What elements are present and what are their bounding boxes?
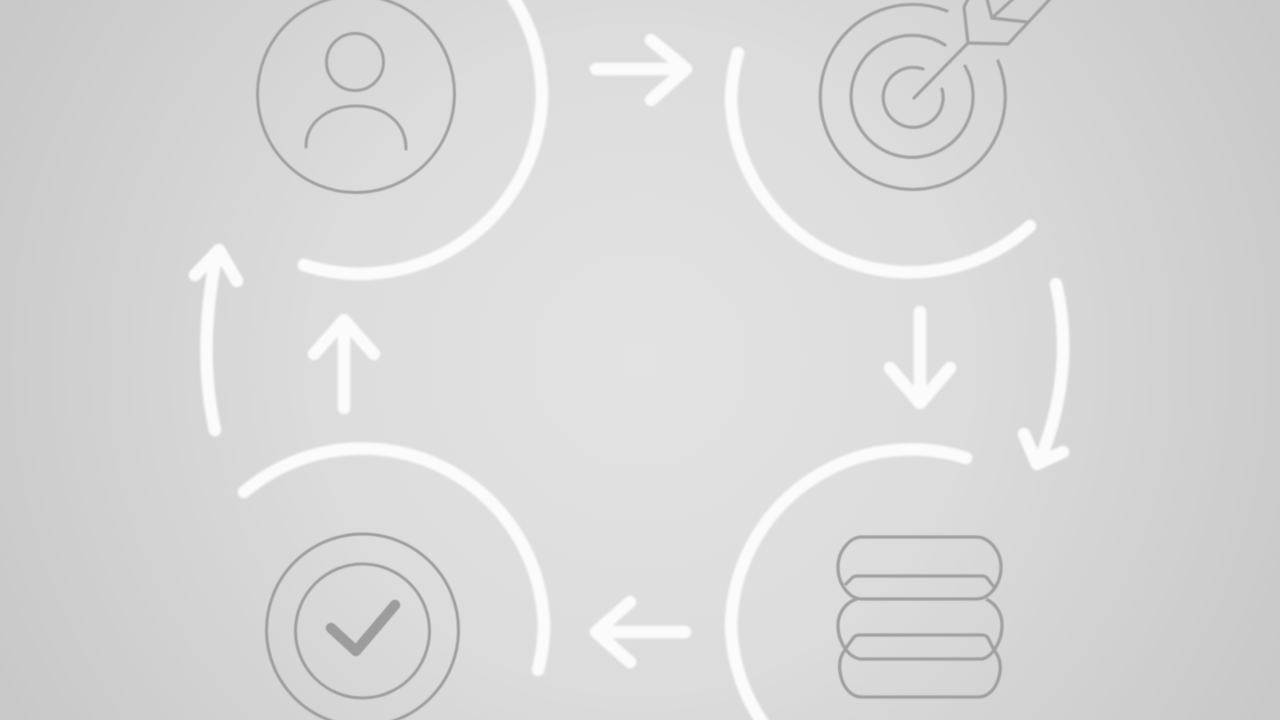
white arcs and arrows xyxy=(195,0,1063,720)
arc: bottom right xyxy=(731,449,966,720)
icon: person xyxy=(258,0,454,192)
arrow: bottom, pointing left xyxy=(596,602,685,662)
arrow: left inner, pointing up xyxy=(314,320,374,408)
arc: top right xyxy=(731,53,1030,272)
arrow: outer right curved, pointing down xyxy=(1024,284,1063,464)
arrow: top, pointing right xyxy=(596,40,686,100)
icon: stacked layers xyxy=(838,537,1002,697)
check mark xyxy=(331,605,395,651)
arc: bottom left xyxy=(244,448,544,670)
icon: target with arrow xyxy=(820,0,1050,189)
arrow: right inner, pointing down xyxy=(890,312,950,403)
arc: top left xyxy=(304,0,542,274)
icon: check badge xyxy=(266,534,458,720)
arrow: outer left curved, pointing up xyxy=(195,250,237,430)
